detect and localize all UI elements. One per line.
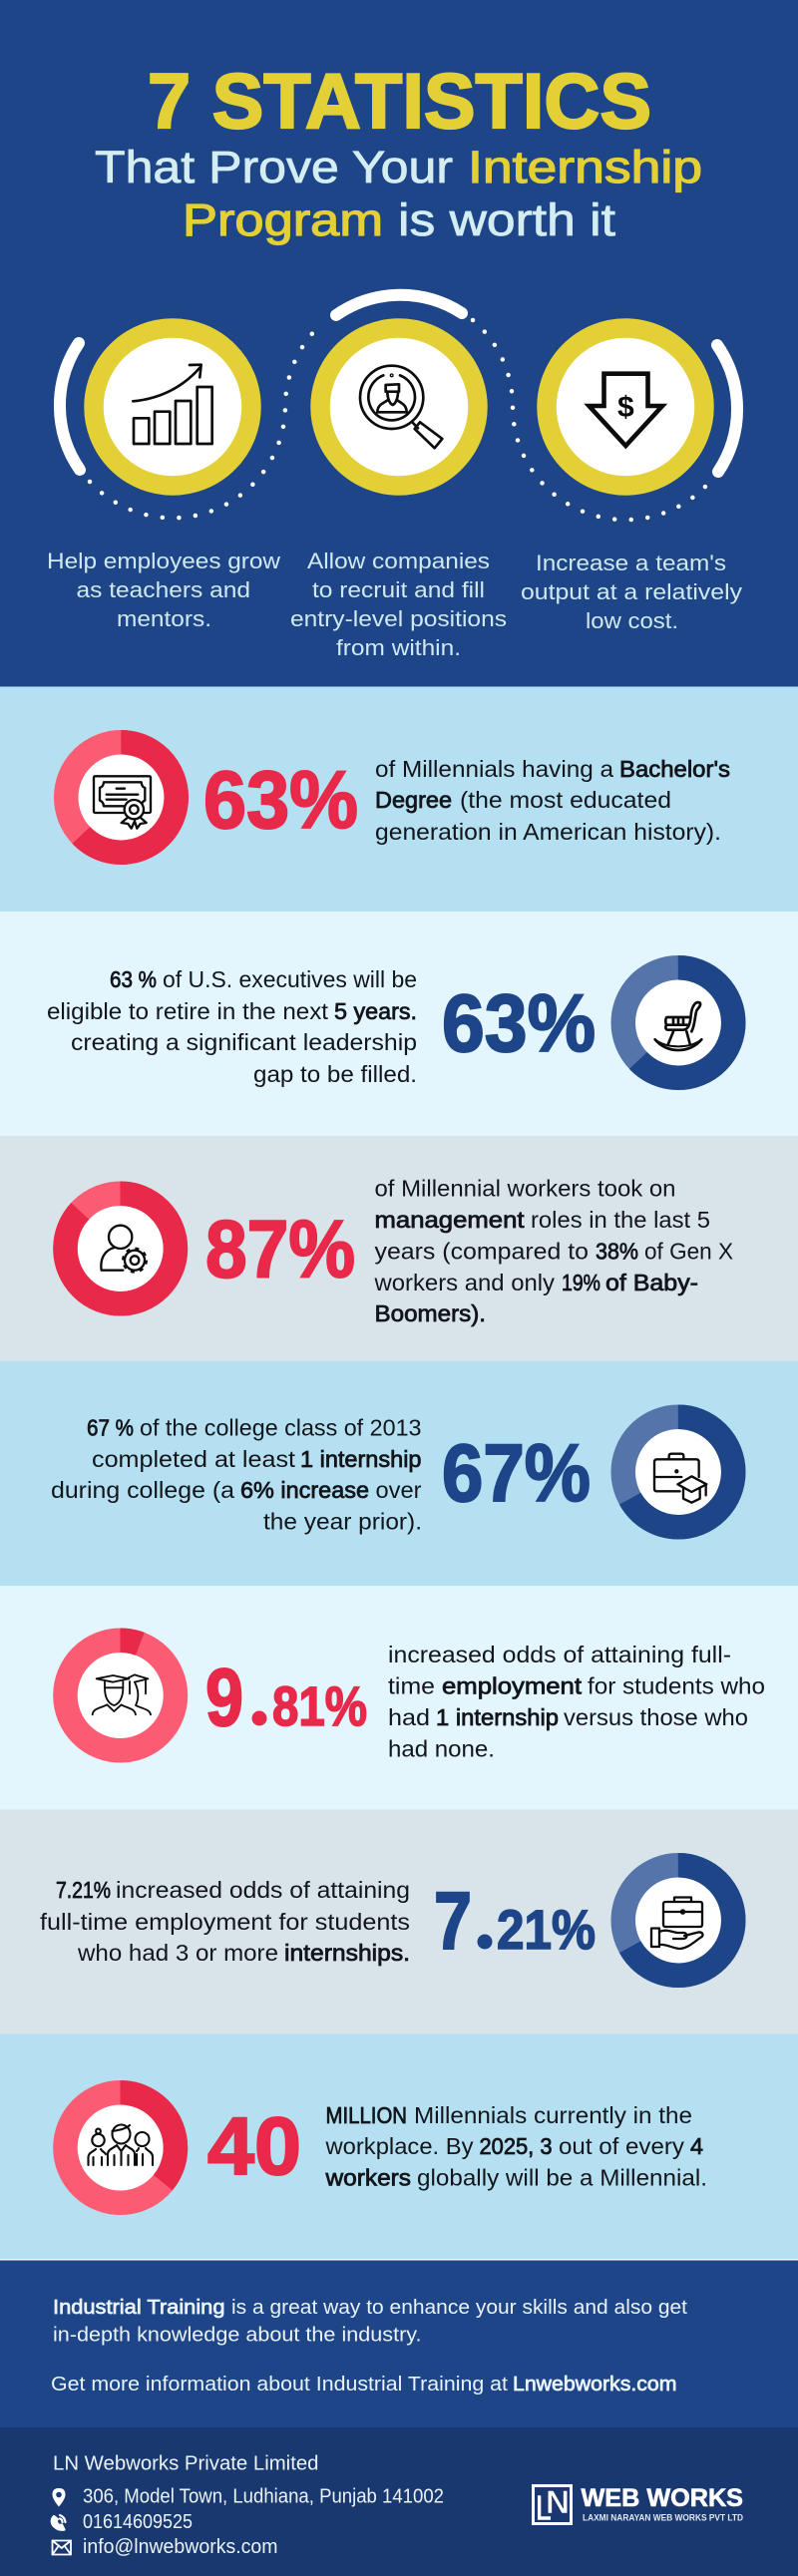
text block: Lnwebworks.com [513,2374,676,2395]
stat description: over [375,1477,422,1503]
stat description: MILLION [325,2102,407,2128]
donut chart with person and gear icon [65,1194,176,1303]
panel: hero header [0,0,798,687]
stat description: 6% increase [240,1477,369,1503]
icon: down arrow with dollar: $ [617,391,634,424]
logo: LAXMI NARAYAN WEB WORKS PVT LTD [583,2513,743,2523]
stat description: years (compared to [375,1239,589,1265]
stat value: 63% [442,978,596,1069]
donut chart with people icon [65,2092,176,2203]
panel: stat 1, 63% bachelor's degree [0,686,798,912]
address with pin icon: 306, Model Town, Ludhiana, Punjab 141002 [83,2485,444,2507]
stat description: of Millennials having a [375,756,613,782]
text block: is a great way to enhance your skills and also get [231,2297,687,2319]
stat description: during college (a [51,1477,234,1503]
logo: L [536,2487,552,2528]
icon: down arrow with dollar [547,328,704,486]
stat description: of Gen X [644,1239,733,1265]
text: benefit 1: as teachers and [76,577,250,602]
stat description: (the most educated [460,787,671,813]
stat value [205,1653,367,1743]
stat description: management [375,1207,525,1233]
stat description: creating a significant leadership [71,1029,417,1055]
stat description: Degree [375,787,452,813]
email with envelope icon: info@lnwebworks.com [83,2536,277,2558]
stat description: workers and only [373,1270,556,1295]
stat description: the year prior). [263,1508,422,1534]
stat value [434,1876,596,1967]
donut chart with graduates icon [65,1641,176,1750]
text: benefit 2 [290,549,507,660]
stat value: 63% [203,755,358,846]
panel: stat 3, 87% management roles [0,1136,798,1361]
text: benefit 1 [47,549,281,631]
stat description: 5 years. [334,998,417,1024]
text: benefit 1: mentors. [117,606,211,631]
text: benefit 3 [521,551,743,633]
stat description: 38% [596,1239,638,1265]
stat description: of Millennial workers took on [375,1175,676,1201]
stat description: versus those who [564,1704,748,1730]
text: benefit 3: Increase a team's [536,551,726,575]
stat description: Millennials currently in the [414,2102,692,2128]
text: benefit 2: from within. [336,635,461,660]
stat value: 40 [207,2101,301,2192]
logo: WEB WORKS [581,2484,743,2512]
stat description: gap to be filled. [253,1061,417,1087]
text block [51,2297,687,2395]
stat description: who had 3 or more [77,1940,278,1966]
panel: stat 6, 7.21% three internships [0,1809,798,2034]
text: benefit 3: output at a relatively [521,579,743,604]
text: benefit 2: Allow companies [307,549,490,573]
stat description: Boomers). [375,1300,486,1326]
stat description: employment [442,1673,583,1699]
donut chart with hand and briefcase icon [623,1865,733,1976]
stat description [51,1414,422,1534]
stat description: eligible to retire in the next [47,998,329,1024]
stat value: 21% [497,1898,596,1961]
donut chart with rocking chair icon [623,967,733,1078]
stat description: Bachelor's [619,756,730,782]
title: is worth it [398,194,616,245]
title: That Prove Your [95,142,453,192]
stat description: had [388,1704,430,1730]
stat description: 7.21% [56,1877,111,1903]
text block: Industrial Training [53,2297,225,2319]
title: Program [183,194,383,245]
stat description: 63 % [110,966,157,992]
stat description: out of every [559,2133,685,2159]
panel: footer contact [0,2427,798,2576]
stat description: for students who [588,1673,765,1699]
stat value: 9 [205,1653,243,1743]
icon: magnifier with recruit [320,328,478,486]
stat description: workplace. By [324,2133,474,2159]
text: benefit 2: entry-level positions [290,606,507,631]
panel: stat 4, 67% completed internship [0,1361,798,1586]
company name: LN Webworks Private Limited [53,2453,319,2475]
stat description [47,966,417,1087]
phone with handset icon: 01614609525 [83,2511,193,2533]
stat description: 1 internship [436,1704,559,1730]
text: benefit 3: low cost. [586,608,678,633]
panel: stat 7, 40 million millennials [0,2034,798,2259]
stat description [373,1175,733,1326]
text: benefit 2: to recruit and fill [312,577,485,602]
stat description: roles in the last 5 [531,1207,710,1233]
stat description: globally will be a Millennial. [417,2164,707,2190]
stat description: 1 internship [300,1446,421,1472]
stat description: of U.S. executives will be [163,966,417,992]
stat description [40,1877,410,1966]
logo: N [546,2484,570,2520]
stat description: 67 % [87,1414,134,1440]
stat value: 67% [442,1428,591,1519]
panel: stat 5, 9.81% one internship [0,1586,798,1809]
stat description: 4 [690,2133,703,2159]
stat description [388,1642,765,1761]
stat description [324,2102,707,2190]
stat description: of the college class of 2013 [140,1414,421,1440]
text: benefit 1: Help employees grow [47,549,281,573]
stat value: 81% [272,1674,367,1737]
stat description: full-time employment for students [40,1909,410,1935]
stat description: increased odds of attaining [116,1877,410,1903]
stat description: generation in American history). [375,819,721,845]
stat description: internships. [284,1940,410,1966]
panel: stat 2, 63% executives retiring [0,912,798,1137]
stat description: 19% [562,1270,600,1295]
icon: growth chart [94,328,251,486]
stat value: 7 [434,1876,472,1967]
stat description: of Baby- [605,1270,698,1295]
donut chart with certificate icon [66,742,177,853]
stat description: 2025, 3 [479,2133,553,2159]
stat description: completed at least [92,1446,296,1472]
text block: in-depth knowledge about the industry. [53,2324,421,2346]
stat description: had none. [388,1735,495,1761]
text block: Get more information about Industrial Training at [51,2374,508,2395]
panel: industrial training call to action [0,2259,798,2427]
stat description: workers [324,2164,411,2190]
donut chart with briefcase and cap icon [623,1417,733,1527]
stat value: 87% [205,1205,355,1294]
decorative arcs and dotted ring [60,295,737,520]
title: Internship [468,142,702,192]
stat description: time [388,1673,435,1699]
logo [533,2484,743,2528]
title: 7 STATISTICS [148,57,651,145]
title [95,57,702,245]
stat description [375,756,730,845]
stat description: increased odds of attaining full- [388,1642,731,1667]
